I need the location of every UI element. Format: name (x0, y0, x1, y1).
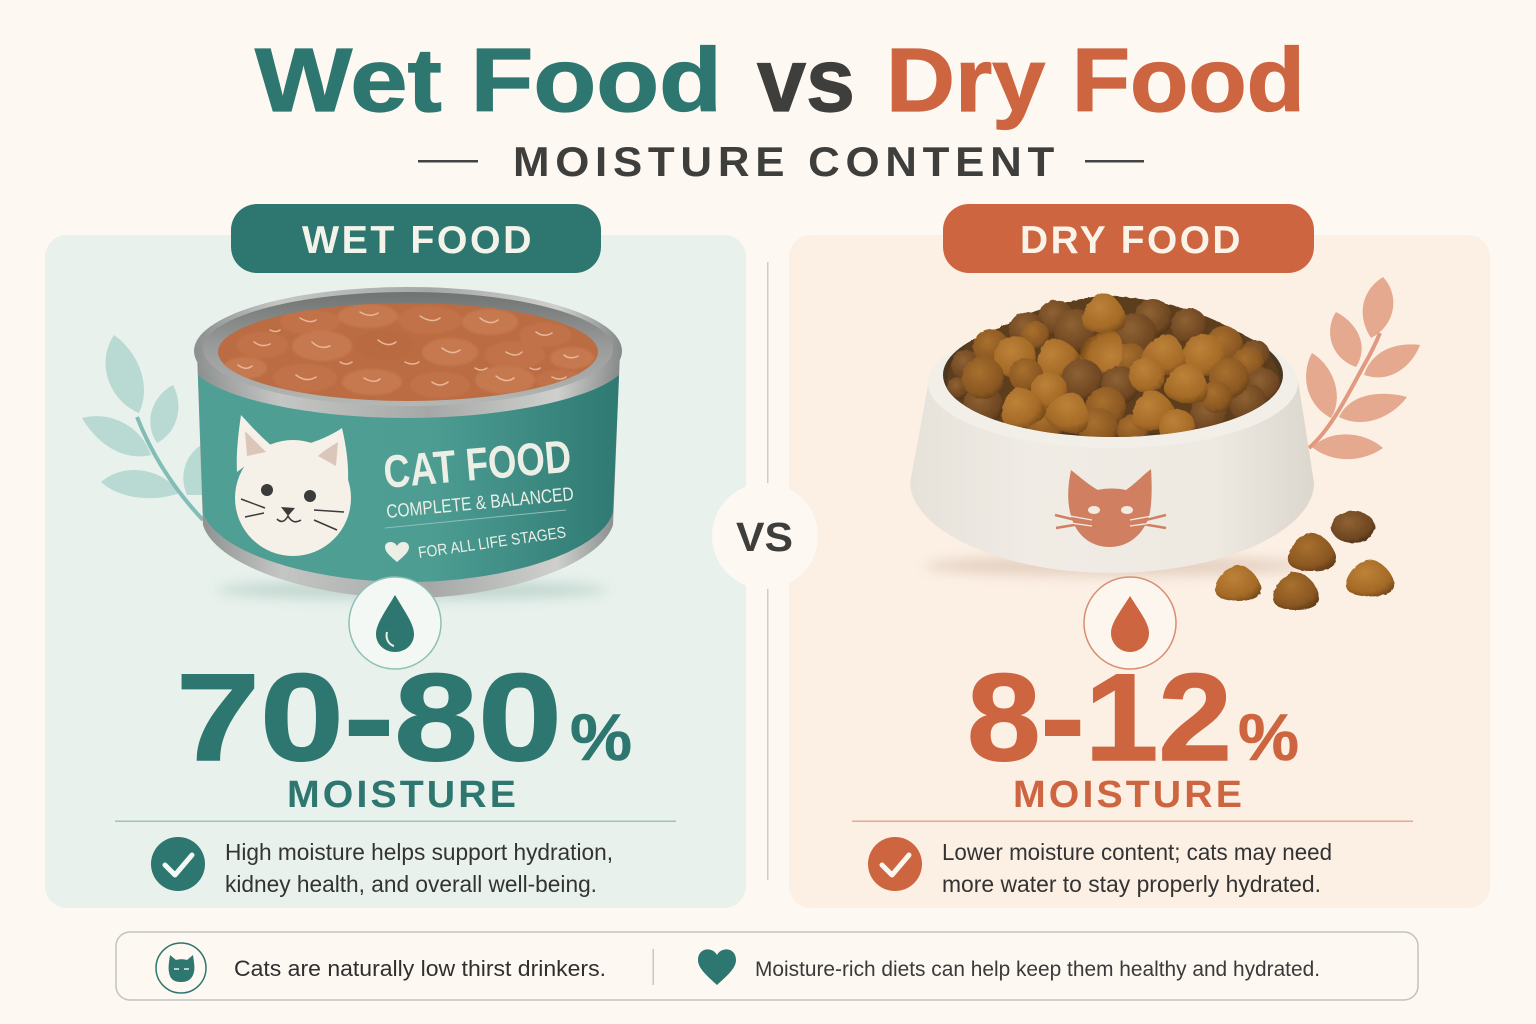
text: wet benefit: kidney health, and overall well-being. (225, 871, 597, 897)
cat silhouette on bowl (1055, 469, 1166, 547)
leaf sprig: wet (82, 335, 205, 520)
title (255, 31, 1305, 131)
icon: water drop dry (1084, 577, 1176, 669)
title: vs (757, 31, 855, 131)
can label text (381, 430, 575, 562)
stat: 8-12%: % (1238, 700, 1299, 774)
can label text: COMPLETE & BALANCED (385, 484, 575, 523)
stat: 70-80%: % (570, 700, 632, 774)
kibble pile (947, 293, 1280, 448)
panel: wet food (45, 235, 746, 908)
text: dry note: Lower moisture content; cats may need (942, 839, 1332, 865)
footer callout (116, 932, 1418, 1000)
cat face on can (235, 415, 351, 556)
text: wet benefit (225, 839, 613, 897)
icon: water drop wet (349, 577, 441, 669)
center divider with vs badge (712, 262, 818, 880)
icon: check dry (868, 837, 922, 891)
bowl rim (928, 318, 1298, 448)
center divider with vs badge: VS (736, 514, 793, 560)
badge: wet food (231, 204, 601, 273)
text: thirst: Cats are naturally low thirst drinkers. (234, 956, 606, 981)
can body (197, 352, 620, 598)
can rim (194, 287, 622, 415)
stat: 8-12%: 8-12 (967, 649, 1232, 787)
stat: 70-80%: 70-80 (176, 649, 562, 787)
text: dry note (942, 839, 1332, 897)
can label text: CAT FOOD (381, 430, 573, 498)
wet food can (194, 287, 622, 600)
icon: heart (698, 949, 736, 985)
label: wet moisture: MOISTURE (287, 774, 519, 816)
title: Dry Food (886, 31, 1305, 131)
title: Wet Food (255, 31, 722, 131)
badge: dry food (943, 204, 1314, 273)
panel: dry food (789, 235, 1490, 908)
subtitle: moisture content: MOISTURE CONTENT (513, 138, 1060, 185)
can label text: FOR ALL LIFE STAGES (417, 524, 567, 562)
icon: check wet (151, 837, 205, 891)
icon: cat (156, 943, 206, 993)
bowl body (910, 380, 1314, 573)
badge: wet food: WET FOOD (302, 219, 534, 262)
badge: dry food: DRY FOOD (1020, 219, 1243, 262)
label: dry moisture: MOISTURE (1013, 774, 1245, 816)
scattered kibble (1215, 511, 1394, 610)
dry food bowl (910, 293, 1314, 576)
wet food surface (218, 303, 598, 401)
leaf sprig: dry (1306, 277, 1420, 459)
text: wet benefit: High moisture helps support hydration, (225, 839, 613, 865)
text: moisture-rich: Moisture-rich diets can help keep them healthy and hydrated. (755, 958, 1320, 981)
can label (198, 375, 619, 582)
text: dry note: more water to stay properly hydrated. (942, 871, 1321, 897)
stat: 70-80% (176, 649, 632, 787)
